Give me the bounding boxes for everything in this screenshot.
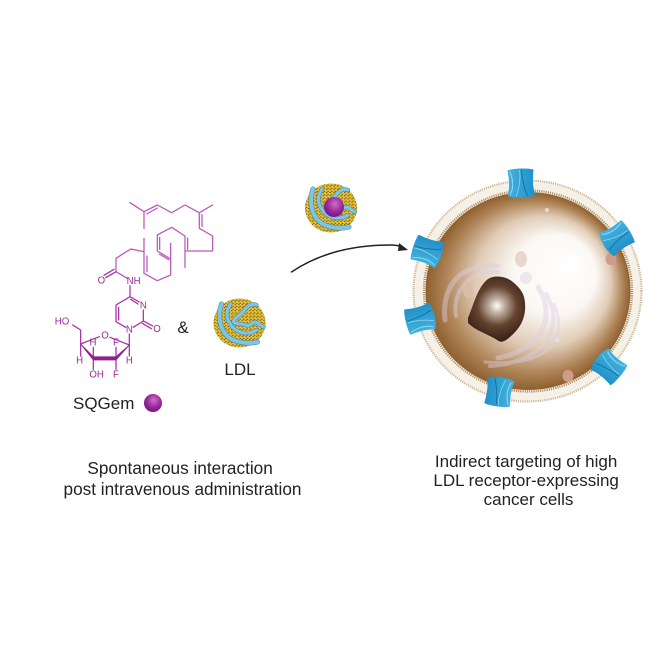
caption: indirect targeting: Indirect targeting of high: [435, 452, 617, 471]
atom labels: H: [76, 356, 83, 367]
caption: indirect targeting: cancer cells: [484, 490, 573, 509]
atom labels: N: [126, 325, 133, 336]
squalene chain: [116, 203, 213, 281]
organelles: [445, 208, 616, 382]
atom labels: F: [113, 369, 119, 380]
label: ampersand: &: [177, 318, 189, 337]
pyrimidine and sugar bonds: [73, 269, 153, 369]
icon: SQGem purple ball: [144, 394, 162, 412]
cytoplasm: [426, 192, 630, 390]
cancer cell: [403, 168, 642, 408]
atom labels: OH: [89, 369, 104, 380]
label: LDL: LDL: [224, 360, 256, 379]
atom labels: [55, 276, 161, 380]
atom labels: O: [101, 330, 109, 341]
cell membrane: [414, 180, 642, 402]
caption: spontaneous interaction: post intravenous administration: [64, 479, 301, 499]
atom labels: H: [90, 338, 97, 349]
atom labels: N: [140, 300, 147, 311]
chemical structure: SQGem: [55, 203, 213, 380]
atom labels: O: [98, 276, 106, 287]
arrow to cancer cell: [292, 243, 408, 272]
nucleus: [468, 276, 525, 342]
LDL receptors: [403, 168, 637, 408]
caption: spontaneous interaction: Spontaneous interaction: [87, 458, 273, 478]
atom labels: F: [113, 338, 119, 349]
caption: indirect targeting: LDL receptor-expressing: [433, 471, 619, 490]
label: SQGem: SQGem: [73, 394, 134, 413]
SQGem-loaded LDL particle: [305, 184, 357, 232]
atom labels: NH: [127, 276, 141, 287]
sugar ring bold bonds: [81, 344, 129, 360]
atom labels: O: [153, 324, 161, 335]
atom labels: HO: [55, 316, 70, 327]
atom labels: H: [126, 356, 133, 367]
LDL particle: [214, 298, 266, 348]
